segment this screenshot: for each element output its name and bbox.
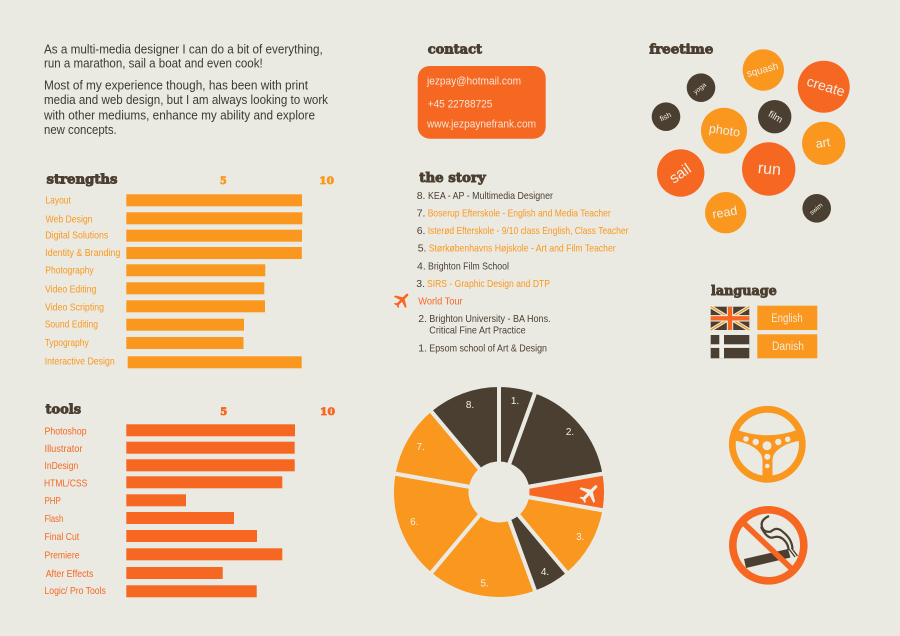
timeline list: Critical Fine Art Practice: [429, 325, 526, 337]
icon: no smoking: [733, 510, 804, 581]
timeline list: Epsom school of Art & Design: [429, 342, 547, 354]
heading: language: language: [711, 284, 777, 299]
intro text block: [43, 42, 329, 137]
bubble: swim: [802, 194, 831, 223]
bar chart: strengths: [126, 194, 302, 368]
bubble: yoga: yoga: [692, 81, 708, 96]
tool labels: PHP: [44, 495, 61, 507]
timeline list: Brighton University - BA Hons.: [429, 313, 551, 325]
panel: freetime: [649, 43, 850, 233]
bubble: fish: fish: [658, 110, 673, 123]
timeline list: Isterød Efterskole - 9/10 class English, Class Teacher: [428, 225, 629, 237]
bar chart: tools: [126, 424, 295, 597]
skill labels: strengths: Photography: [45, 265, 94, 277]
timeline list: 4.: [417, 260, 426, 272]
intro text block: new concepts.: [44, 123, 117, 137]
chart: career pie: [392, 385, 606, 599]
intro text block: run a marathon, sail a boat and even cook!: [44, 57, 263, 71]
bubble: photo: photo: [708, 121, 741, 140]
bubble: photo: [701, 108, 747, 154]
bubble: read: read: [711, 203, 738, 222]
skill labels: strengths: Web Design: [46, 213, 93, 225]
scale labels: tools: 5: [220, 407, 227, 418]
button: Danish: Danish: [772, 341, 804, 353]
pie labels: 1.: [511, 396, 519, 407]
timeline list: 7.: [417, 208, 425, 220]
contact card: www.jezpaynefrank.com: [426, 118, 536, 130]
skill labels: strengths: Typography: [45, 337, 89, 349]
heading: tools: tools: [46, 403, 81, 418]
skill labels: strengths: Video Editing: [45, 284, 96, 296]
contact card: +45 22788725: [428, 98, 492, 110]
tool labels: HTML/CSS: [44, 478, 87, 490]
tool labels: Premiere: [44, 550, 80, 562]
bubble: squash: squash: [746, 61, 780, 80]
timeline list: 1.: [418, 342, 427, 354]
scale labels: strengths: 5: [220, 176, 227, 187]
tool labels: Flash: [44, 513, 63, 525]
tool labels: [44, 426, 106, 597]
intro text block: media and web design, but I am always looking to work: [44, 93, 329, 107]
icon: steering wheel: [732, 409, 802, 481]
tool labels: Photoshop: [44, 426, 87, 438]
pie labels: 5.: [481, 578, 489, 590]
pie labels: [410, 396, 584, 590]
pie labels: 3.: [576, 532, 584, 543]
bubble: fish: [652, 102, 680, 131]
tool labels: After Effects: [46, 568, 93, 580]
heading: freetime: freetime: [649, 43, 713, 58]
timeline list: KEA - AP - Multimedia Designer: [428, 190, 553, 202]
bubble: squash: [743, 49, 784, 91]
skill labels: strengths: [45, 194, 120, 368]
tool labels: Final Cut: [44, 531, 79, 543]
bubble: sail: [657, 149, 704, 197]
pie labels: 7.: [417, 442, 425, 453]
timeline list: Størkøbenhavns Højskole - Art and Film Teacher: [429, 243, 616, 255]
skill labels: strengths: Interactive Design: [45, 356, 115, 368]
bubble: create: create: [805, 73, 847, 100]
heading: contact: contact: [428, 43, 482, 58]
icon: UK flag: [711, 307, 749, 330]
timeline list: 6.: [417, 225, 425, 237]
panel: language: [711, 284, 817, 358]
timeline list: SIRS - Graphic Design and DTP: [427, 278, 550, 290]
panel: tools: [44, 403, 335, 597]
heading: the story: the story: [419, 171, 486, 186]
bubble: sail: sail: [666, 160, 695, 187]
scale labels: tools: [220, 407, 335, 418]
pie labels: 4.: [541, 567, 549, 578]
timeline list: 2.: [418, 313, 427, 325]
pie labels: 8.: [466, 400, 474, 411]
timeline list: 3.: [416, 278, 425, 290]
intro text block: Most of my experience though, has been with print: [44, 78, 308, 92]
skill labels: strengths: Layout: [46, 194, 71, 206]
bubble: art: [802, 122, 845, 165]
intro text block: with other mediums, enhance my ability and explore: [43, 108, 315, 122]
scale labels: strengths: [220, 176, 334, 187]
panel: contact: [418, 43, 546, 139]
panel: the story: [390, 171, 629, 354]
bubble: swim: swim: [809, 202, 824, 217]
timeline list: [416, 190, 629, 354]
bubble: yoga: [687, 73, 715, 102]
contact card: jezpay@hotmail.com: [426, 75, 521, 87]
bubble: run: [742, 142, 795, 196]
heading: strengths: strengths: [46, 172, 118, 188]
bubble: run: run: [757, 160, 782, 179]
button: English: English: [771, 313, 803, 325]
bubble: art: art: [815, 135, 832, 151]
scale labels: strengths: 10: [319, 176, 334, 187]
bubble: film: [758, 100, 791, 133]
scale labels: tools: 10: [320, 407, 335, 418]
timeline list: 5.: [418, 243, 426, 255]
icon: plane in pie: [575, 479, 604, 507]
bubble: create: [798, 61, 850, 113]
skill labels: strengths: Digital Solutions: [45, 230, 108, 242]
pie labels: 2.: [566, 427, 574, 438]
skill labels: strengths: Sound Editing: [45, 319, 98, 331]
bubble: film: film: [766, 109, 784, 126]
tool labels: Illustrator: [44, 443, 83, 455]
bubble: read: [705, 192, 746, 233]
icon: plane: [390, 288, 414, 312]
timeline list: Boserup Efterskole - English and Media Teacher: [428, 208, 611, 220]
tool labels: Logic/ Pro Tools: [44, 585, 106, 597]
tool labels: InDesign: [44, 460, 78, 472]
timeline list: 8.: [417, 190, 425, 202]
intro text block: As a multi-media designer I can do a bit of everything,: [44, 42, 323, 56]
skill labels: strengths: Identity & Branding: [45, 247, 120, 259]
icon: Danish flag: [711, 335, 749, 358]
skill labels: strengths: Video Scripting: [45, 301, 104, 313]
panel: strengths: [45, 172, 334, 368]
timeline list: Brighton Film School: [428, 260, 509, 272]
pie labels: 6.: [410, 517, 418, 528]
timeline list: World Tour: [418, 295, 463, 307]
contact card: [418, 66, 546, 139]
